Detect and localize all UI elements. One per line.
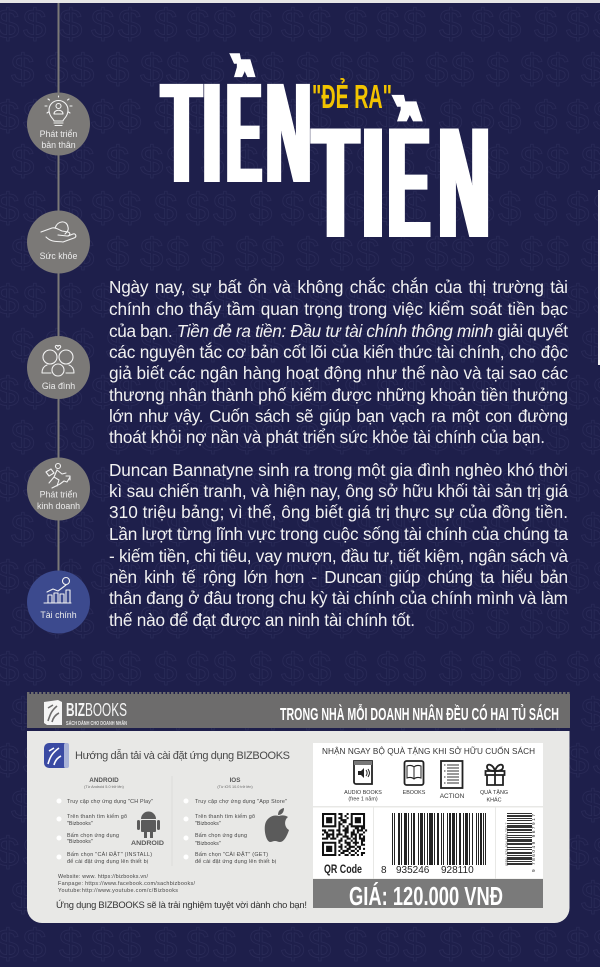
text block: paragraph 1: lớn như vậy. Cuốn sách sẽ giúp bạn vạch ra một con đường bbox=[109, 406, 568, 426]
icon: family faces bbox=[42, 345, 74, 376]
title word: TIỀN (first): Ề bbox=[227, 51, 261, 216]
barcode number: 928110 bbox=[441, 865, 474, 876]
title word: TIỀN (first): T bbox=[162, 51, 201, 216]
guide: iOS steps: (Từ iOS 10.0 trở lên) bbox=[217, 785, 253, 789]
text block: paragraph 1: các nguyên tắc cơ bản cốt lõi của kiến thức tài chính, cho độc bbox=[109, 342, 568, 362]
barcode number: 8 bbox=[381, 865, 387, 876]
guide: Android steps: "Bizbooks" bbox=[67, 821, 93, 827]
icon: hand holding heart bbox=[41, 222, 76, 242]
panel: gifts: AUDIO BOOKS bbox=[344, 790, 382, 796]
icon: ebook tablet bbox=[404, 761, 424, 785]
ISBN bars bbox=[507, 813, 532, 866]
guide: Android steps: ANDROID bbox=[89, 777, 119, 784]
text block: paragraph 2: thân đang ở đâu trong chu kỳ tài chính của chính mình và làm bbox=[109, 588, 568, 608]
guide: Android steps: (Từ Android 5.0 trở lên) bbox=[84, 785, 125, 789]
text block: paragraph 2: Duncan Bannatyne sinh ra trong một gia đình nghèo khó thời bbox=[109, 460, 568, 480]
publisher header band bbox=[27, 694, 570, 728]
icon: Android robot bbox=[131, 812, 164, 847]
text block: paragraph 1 bbox=[109, 277, 568, 447]
links: website, fanpage, youtube bbox=[58, 874, 196, 894]
barcode number: 935246 bbox=[396, 865, 430, 876]
text block: paragraph 2: 310 triệu bảng; vì thế, ông biết giá trị thực sự của đồng tiền. bbox=[109, 502, 568, 522]
guide: iOS steps: "Bizbooks" bbox=[195, 821, 221, 827]
category: Phát triển kinh doanh: Phát triển bbox=[40, 490, 77, 500]
icon: gift bbox=[486, 765, 504, 785]
title: TIỀN "ĐẺ RA" TIỀN bbox=[162, 51, 489, 274]
panel: gifts: EBOOKS bbox=[403, 790, 426, 796]
guide: Android steps: Truy cập chợ ứng dụng "CH Play" bbox=[67, 799, 153, 805]
category: Phát triển kinh doanh bbox=[27, 458, 90, 520]
guide: iOS steps: Truy cập chợ ứng dụng "App Store" bbox=[195, 799, 287, 805]
category: Gia đình: Gia đình bbox=[42, 381, 75, 391]
icon: action sheet bbox=[441, 761, 462, 788]
title word: TIỀN (second): I bbox=[362, 91, 384, 273]
panel: gifts: NHẬN NGAY BỘ QUÀ TẶNG KHI SỞ HỮU CUỐN SÁCH bbox=[322, 745, 535, 756]
text block: paragraph 2: nền kinh tế rộng lớn hơn - Duncan giúp chúng ta hiểu bản bbox=[109, 567, 568, 587]
guide: Android steps: để cài đặt ứng dụng lên thiết bị bbox=[67, 858, 148, 865]
guide: iOS steps: Bấm chọn "CÀI ĐẶT" (GET) bbox=[195, 851, 268, 858]
links: website, fanpage, youtube: Youtube:http://www.youtube.com/c/Bizbooks bbox=[58, 888, 178, 894]
timeline: category navigation bbox=[27, 3, 90, 634]
panel: EAN barcode bbox=[374, 808, 495, 878]
title word: TIỀN (first): N bbox=[266, 51, 311, 215]
category: Phát triển kinh doanh: kinh doanh bbox=[37, 501, 80, 511]
barcode bars bbox=[392, 813, 486, 865]
icon: light bulb with person bbox=[45, 96, 72, 126]
guide heading: Hướng dẫn tải và cài đặt ứng dụng BIZBOOKS bbox=[75, 749, 290, 762]
guide: iOS steps: IOS bbox=[230, 777, 240, 784]
text block: paragraph 2: Lần lượt từng lĩnh vực trong cuộc sống tài chính của chúng ta bbox=[109, 524, 568, 544]
category: Phát triển bản thân: Phát triển bbox=[40, 129, 77, 139]
guide: Android steps: "Bizbooks" bbox=[67, 839, 93, 845]
text block: paragraph 1: thoát khỏi nợ nần và phát triển sức khỏe tài chính của bạn. bbox=[109, 427, 545, 447]
ISBN text: ISBN: 978-604-996-791-7 bbox=[505, 823, 509, 866]
panel: gifts bbox=[313, 743, 543, 806]
links: website, fanpage, youtube: Fanpage: https://www.facebook.com/sachbizbooks/ bbox=[58, 881, 196, 887]
icon: Bizbooks logo bbox=[44, 700, 62, 725]
category: Phát triển bản thân: bản thân bbox=[41, 140, 76, 150]
price bar: GIÁ: 120.000 VNĐ bbox=[349, 881, 503, 911]
guide: iOS steps bbox=[184, 777, 287, 865]
icon: audio book bbox=[354, 761, 372, 784]
icon: Android robot: ANDROID bbox=[131, 840, 164, 847]
guide: Android steps: Bấm chọn ứng dụng bbox=[67, 833, 119, 839]
title word: "ĐẺ RA": "ĐẺ RA" bbox=[312, 78, 392, 115]
QR code graphic bbox=[322, 814, 367, 855]
guide: iOS steps: để cài đặt ứng dụng lên thiết bị bbox=[195, 858, 276, 865]
title word: TIỀN (first): I bbox=[203, 52, 221, 216]
text block: paragraph 2 bbox=[109, 460, 568, 630]
category: Gia đình bbox=[27, 336, 90, 399]
panel: gifts: ACTION bbox=[440, 793, 465, 800]
guide: iOS steps: Bấm chọn ứng dụng bbox=[195, 833, 247, 839]
ISBN number: 9 786049 967917 bbox=[531, 814, 537, 872]
category: Tài chính (active): Tài chính bbox=[40, 610, 77, 620]
text block: paragraph 2: thế nào để đạt được an ninh tài chính tốt. bbox=[109, 610, 415, 630]
category: Tài chính (active) bbox=[27, 570, 90, 634]
panel: ISBN barcode bbox=[496, 808, 543, 878]
title word: TIỀN (second) bbox=[313, 91, 489, 274]
panel: app guide and purchase info bbox=[27, 731, 570, 923]
category: Sức khỏe: Sức khỏe bbox=[40, 251, 77, 261]
links: website, fanpage, youtube: Website: www. https://bizbooks.vn/ bbox=[58, 874, 148, 880]
title word: TIỀN (second): Ề bbox=[388, 92, 429, 273]
category: Sức khỏe bbox=[27, 210, 90, 274]
guide: Android steps bbox=[56, 777, 153, 865]
text block: paragraph 1: thương nhân thành phố kiếm được những khoản tiền thưởng bbox=[109, 385, 568, 405]
brand tagline: SÁCH DÀNH CHO DOANH NHÂN bbox=[66, 720, 127, 727]
text block: paragraph 2: - kiếm tiền, chi tiêu, vay mượn, đầu tư, tiết kiệm, ngân sách và bbox=[109, 546, 568, 566]
icon: BIZBOOKS app bbox=[44, 743, 69, 768]
title word: TIỀN (second): N bbox=[439, 93, 489, 274]
guide: iOS steps: "Bizbooks" bbox=[195, 841, 221, 847]
icon: Apple logo bbox=[265, 808, 289, 842]
text block: paragraph 1: của bạn. Tiền đẻ ra tiền: Đầu tư tài chính thông minh giải quyết bbox=[109, 321, 568, 341]
text block: paragraph 2: kì sau chiến tranh, và hiện nay, ông sở hữu khối tài sản trị giá bbox=[109, 481, 568, 501]
panel: QR code: QR Code bbox=[324, 862, 362, 876]
closing statement: Ứng dụng BIZBOOKS sẽ là trải nghiệm tuyệt vời dành cho bạn! bbox=[56, 899, 307, 910]
brand: BIZBOOKS: BIZBOOKS bbox=[66, 700, 127, 720]
category: Phát triển bản thân bbox=[27, 92, 90, 156]
guide: Android steps: Trên thanh tìm kiếm gõ bbox=[67, 814, 127, 820]
title word: TIỀN (first) bbox=[162, 51, 311, 216]
text block: paragraph 1: giả biết các ngân hàng hoạt động như thế nào và tại sao các bbox=[109, 363, 568, 383]
panel: gifts: QUÀ TẶNG bbox=[480, 789, 508, 796]
panel: QR code bbox=[313, 808, 373, 878]
panel: gifts: (free 1 năm) bbox=[348, 796, 378, 802]
icon: bar chart with coin bbox=[44, 578, 71, 603]
title word: TIỀN (second): T bbox=[313, 92, 358, 273]
guide: Android steps: Bấm chọn "CÀI ĐẶT" (INSTALL) bbox=[67, 851, 152, 858]
text block: paragraph 1: Ngày nay, sự bất ổn và không chắc chắn của thị trường tài bbox=[109, 277, 568, 297]
guide: iOS steps: Trên thanh tìm kiếm gõ bbox=[195, 814, 255, 820]
icon: businessman running up arrow bbox=[46, 464, 70, 488]
panel: gifts: KHÁC bbox=[487, 796, 502, 804]
text block: paragraph 1: chính cho thấy tầm quan trọng trong việc kiểm soát tiền bạc bbox=[109, 299, 568, 319]
